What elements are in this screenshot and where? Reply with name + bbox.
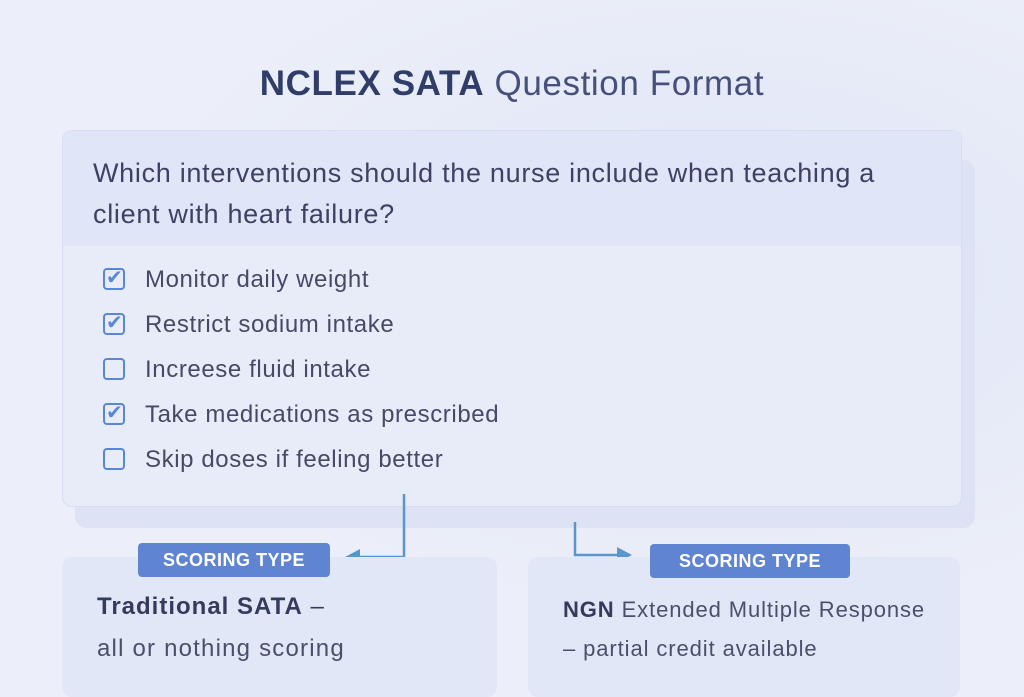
question text: Which interventions should the nurse include when teaching a: [93, 158, 875, 188]
option list: Monitor daily weight: [145, 266, 369, 293]
panel: NGN: – partial credit available: [563, 636, 818, 661]
panel shadow: [75, 160, 975, 528]
badge: scoring type right: SCORING TYPE: [679, 551, 821, 571]
option list: Increese fluid intake: [145, 356, 371, 383]
option list: Restrict sodium intake: [145, 311, 394, 338]
panel: traditional SATA: all or nothing scoring: [97, 635, 345, 662]
panel: traditional SATA: [62, 557, 497, 697]
question text: [93, 158, 875, 229]
badge: scoring type left: [138, 543, 330, 577]
question text: client with heart failure?: [93, 199, 395, 229]
option 4 checked: ✔: [106, 402, 123, 424]
option list: Skip doses if feeling better: [145, 446, 443, 473]
panel: traditional SATA: Traditional SATA –: [97, 593, 325, 620]
option 1 checked: ✔: [106, 267, 123, 289]
option 3 unchecked: [103, 358, 125, 380]
title: NCLEX SATA Question Format: [260, 64, 764, 103]
panel: NGN: [528, 557, 960, 697]
panel: question: [62, 130, 962, 507]
badge: scoring type left: SCORING TYPE: [163, 550, 305, 570]
option list: [103, 266, 499, 473]
option 2 checked: ✔: [106, 312, 123, 334]
option list: Take medications as prescribed: [145, 401, 499, 428]
option 5 unchecked: [103, 448, 125, 470]
panel: NGN: NGN Extended Multiple Response: [563, 597, 925, 622]
badge: scoring type right: [650, 544, 850, 578]
question header band: [63, 131, 961, 246]
